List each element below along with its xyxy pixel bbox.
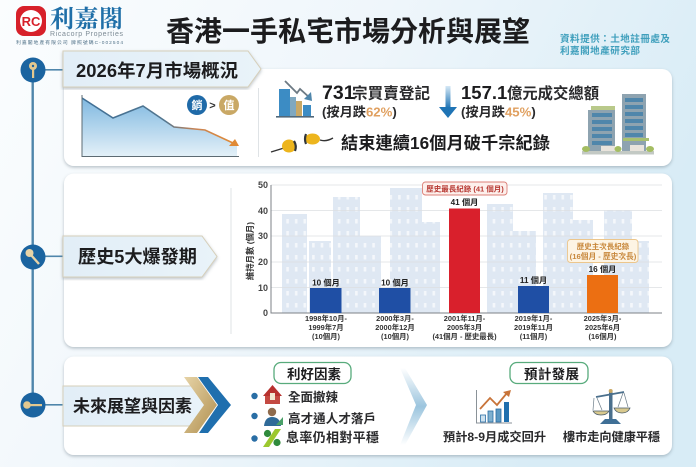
logo: [16, 6, 124, 46]
bar: 2000: 2000年3月-: [376, 314, 414, 323]
section header: outlook and factors: [63, 386, 210, 426]
stat: 731 registrations: [322, 82, 430, 120]
bar: 2019: 2019年1月-: [515, 314, 553, 323]
y axis ticks: 30: [258, 231, 268, 241]
stat: 731 registrations: 宗買賣登記: [352, 84, 430, 102]
stat: 157.1 transaction value: 億元成交總額: [507, 84, 599, 102]
bar: 2000: 10 個月: [381, 278, 409, 288]
bar: 2000: [375, 278, 415, 341]
section header: market overview: 2026年7月市場概況: [76, 60, 238, 81]
badge: expected development: [510, 362, 588, 384]
factor: stable interest rates: 息率仍相對平穩: [286, 430, 379, 445]
source note: 利嘉閣地產研究部: [560, 45, 640, 57]
callout: second longest record: [568, 240, 638, 262]
bar: 2025: 2025年6月: [585, 323, 620, 332]
y axis ticks: 40: [258, 206, 268, 216]
source note: 資料提供：土地註冊處及: [560, 33, 670, 45]
callout: longest record: 歷史最長紀錄 (41 個月): [426, 184, 504, 194]
text: healthy market: 樓市走向健康平穩: [563, 429, 660, 444]
logo english name: Ricacorp Properties: [50, 31, 124, 38]
section header: outlook and factors: 未來展望與因素: [73, 397, 192, 416]
bar: 2025: 2025年3月-: [584, 314, 622, 323]
y axis title: 維持月數 (個月): [245, 222, 255, 280]
stat: 157.1 transaction value: (按月跌45%): [461, 104, 536, 120]
callout: second longest record: 歷史主次長紀錄: [577, 241, 630, 251]
statement: end of streak: 結束連續16個月破千宗紀錄: [341, 133, 550, 153]
arrow: down: [439, 86, 457, 118]
bar: 2001-2005 record: [432, 197, 497, 341]
bar: 2025: 16 個月: [589, 264, 616, 274]
icon: house: [263, 385, 282, 404]
badge: sales over value: [187, 95, 239, 115]
bar: 1998-1999: (10個月): [312, 332, 340, 341]
panel: market overview: [63, 51, 672, 166]
icon: key 3: [20, 392, 46, 418]
y axis ticks: 0: [263, 308, 268, 318]
bar: 2025: (16個月): [589, 332, 617, 341]
bar: 1998-1999: 1998年10月-: [305, 314, 347, 323]
section header: five surge periods: 歷史5大爆發期: [78, 247, 197, 267]
stat: 157.1 transaction value: 157.1: [461, 82, 507, 103]
title: 香港一手私宅市場分析與展望: [166, 16, 530, 47]
bar: 1998-1999: [305, 278, 347, 341]
icon: apartment towers: [582, 94, 654, 154]
timeline: [20, 58, 64, 418]
source note: [560, 33, 670, 57]
bar: 2001-2005 record: 41 個月: [451, 197, 478, 207]
y axis ticks: 20: [258, 257, 268, 267]
section header: five surge periods: [63, 236, 217, 277]
bar: 2019: (11個月): [520, 332, 548, 341]
bar: 2019: 2019年11月: [514, 323, 553, 332]
chevron: faded divider: [400, 368, 427, 445]
bar: 2000: (10個月): [381, 332, 409, 341]
area chart: declining trend: [82, 95, 239, 156]
badge: favourable factors: [274, 362, 351, 384]
chevrons: gold and blue: [184, 377, 231, 433]
stat: 731 registrations: (按月跌62%): [322, 104, 397, 120]
icon: unplugged plug: [271, 134, 333, 152]
stat: 157.1 transaction value: [461, 82, 599, 120]
logo wordmark: 利嘉閣: [50, 6, 123, 33]
bar: 1998-1999: 1999年7月: [308, 323, 344, 332]
section header: market overview: [63, 51, 261, 87]
stat: 731 registrations: 731: [322, 82, 355, 104]
factor: all cooling measures removed: [251, 385, 338, 404]
y axis ticks: [258, 180, 268, 318]
factor: talent scheme: 高才通人才落戶: [288, 411, 376, 426]
badge: sales over value: 銷: [192, 98, 202, 112]
icon: falling city buildings: [276, 81, 314, 118]
bar: 2025: [584, 264, 622, 341]
text: expected rebound: 預計8-9月成交回升: [443, 429, 546, 444]
badge: sales over value: 值: [224, 98, 234, 112]
bar: 2019: [514, 275, 553, 341]
badge: expected development: 預計發展: [524, 366, 580, 382]
icon: key 2: [20, 244, 46, 270]
callout: longest record: [422, 182, 507, 195]
icon: percent: [263, 429, 281, 447]
bar: 1998-1999: 10 個月: [312, 278, 340, 288]
licence line: 利嘉閣地產有限公司 牌照號碼C-002504: [16, 39, 123, 46]
panel: five historic surge periods: [63, 174, 672, 347]
icon: key 1: [20, 58, 46, 82]
factor: all cooling measures removed: 全面撤辣: [288, 390, 338, 404]
icon: balance scale: [593, 389, 630, 424]
badge: favourable factors: 利好因素: [287, 366, 341, 382]
bar chart: surge durations: [245, 180, 662, 341]
bar: 2019: 11 個月: [520, 275, 547, 285]
logo mark: RC: [22, 14, 41, 29]
bar: 2001-2005 record: (41個月 - 歷史最長): [432, 332, 497, 341]
bar: 2001-2005 record: 2005年3月: [447, 323, 482, 332]
factor: stable interest rates: [251, 429, 379, 447]
background skyline: [282, 188, 649, 313]
icon: talent person: [264, 408, 283, 426]
bar: 2000: 2000年12月: [375, 323, 415, 332]
icon: rising bar chart: [476, 390, 512, 423]
panel: outlook and factors: [63, 356, 672, 455]
y axis ticks: 50: [258, 180, 268, 190]
y axis ticks: 10: [258, 283, 268, 293]
bar: 2001-2005 record: 2001年11月-: [444, 314, 486, 323]
badge: sales over value: >: [209, 100, 216, 112]
factor: talent scheme: [251, 408, 376, 426]
callout: second longest record: (16個月 - 歷史次長): [570, 251, 637, 261]
